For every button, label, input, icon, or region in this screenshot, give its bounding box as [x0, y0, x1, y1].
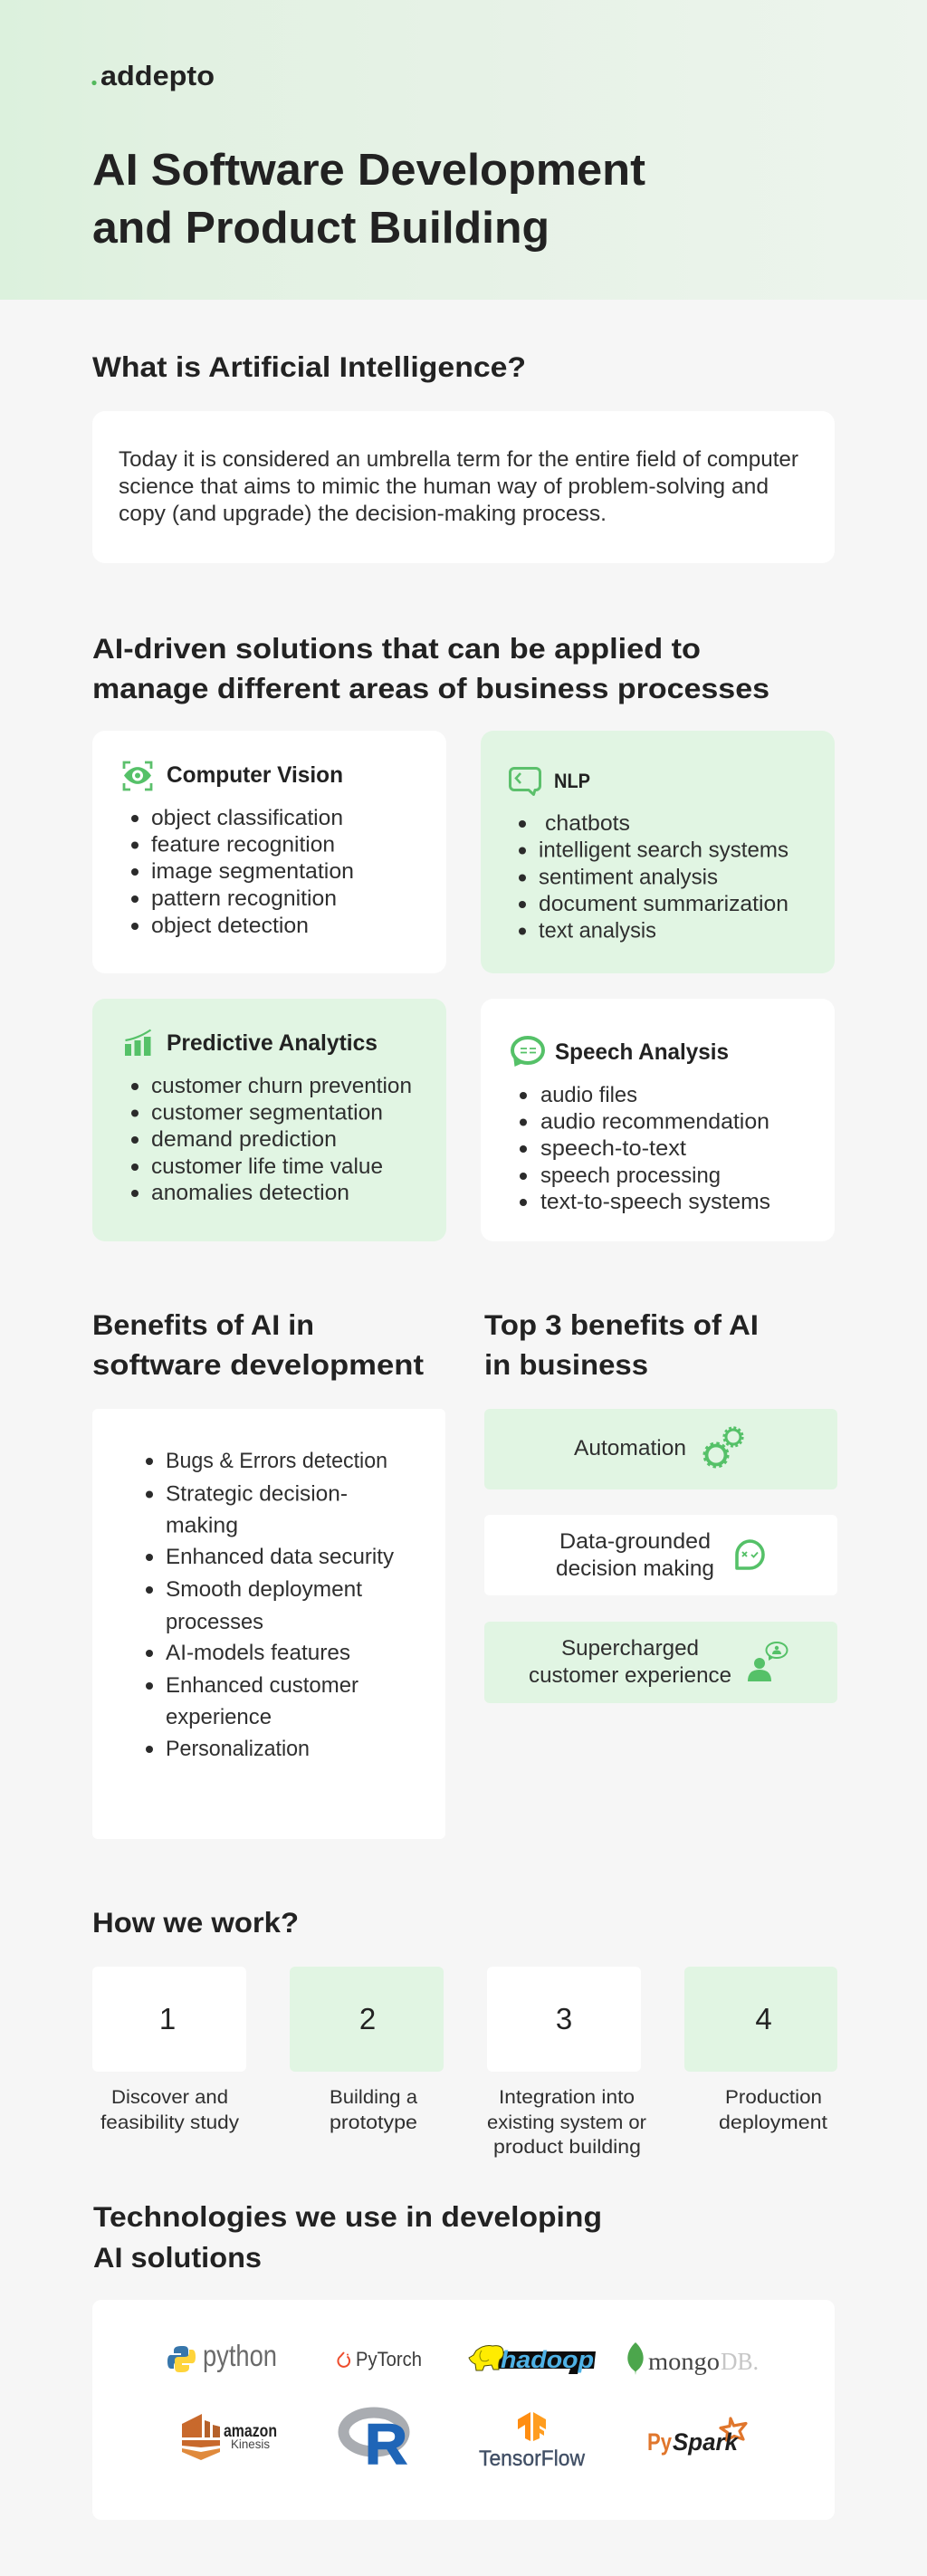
card title: NLP — [554, 770, 590, 792]
list: demand prediction — [151, 1127, 337, 1152]
logo: python: python — [203, 2339, 277, 2372]
step 2: Building a — [330, 2086, 417, 2108]
list: speech-to-text — [540, 1136, 686, 1161]
heading: AI-driven solutions: manage different areas of business processes — [92, 672, 769, 704]
panel: Automation — [484, 1409, 837, 1489]
icon: bar chart with trend — [125, 1030, 150, 1056]
benefits list: Smooth deployment — [166, 1577, 362, 1602]
heading: Benefits of AI in software development — [92, 1308, 425, 1381]
list: speech processing — [540, 1164, 721, 1188]
icon: bubble with cross and check — [737, 1541, 763, 1568]
card title: Predictive Analytics — [167, 1030, 377, 1056]
benefits list: Personalization — [166, 1737, 310, 1761]
logo: PyTorch: PyTorch — [356, 2348, 422, 2370]
logo: addepto: addepto — [100, 60, 215, 91]
logo: mongoDB: DB. — [721, 2348, 759, 2375]
benefits list: Strategic decision- — [166, 1481, 348, 1507]
list — [131, 1074, 412, 1205]
logo: hadoop: hadoop — [501, 2346, 594, 2373]
step 4: 4 — [755, 2002, 772, 2035]
heading: What is Artificial Intelligence: What is Artificial Intelligence? — [92, 350, 526, 383]
benefits list: Bugs & Errors detection — [166, 1449, 387, 1473]
step 4: Production — [725, 2086, 822, 2108]
heading: AI-driven solutions — [92, 632, 769, 704]
panel: Supercharged customer experience — [484, 1622, 837, 1703]
benefits list: Enhanced data security — [166, 1545, 394, 1569]
benefits list: processes — [166, 1610, 263, 1634]
step 1 — [92, 1967, 246, 2133]
logo: PySpark: Spark — [673, 2428, 740, 2456]
logo: amazon Kinesis — [182, 2414, 277, 2460]
list — [519, 811, 788, 943]
panel: Computer Vision — [92, 731, 446, 973]
card title: Computer Vision — [167, 762, 343, 788]
list: customer segmentation — [151, 1101, 383, 1125]
logo: R — [344, 2412, 407, 2476]
step 1: feasibility study — [100, 2112, 239, 2133]
definition text: copy (and upgrade) the decision-making process. — [119, 502, 607, 526]
benefits list: experience — [166, 1705, 272, 1729]
step 3 — [487, 1967, 646, 2158]
heading: Top 3 benefits of AI in business: in business — [484, 1348, 648, 1381]
step 3: product building — [493, 2136, 641, 2158]
label — [529, 1636, 731, 1688]
panel: Predictive Analytics — [92, 999, 446, 1241]
list: audio recommendation — [540, 1110, 769, 1134]
icon: eye in focus frame — [124, 762, 151, 790]
logo: PySpark: Py — [647, 2428, 672, 2456]
logo: PySpark — [647, 2418, 746, 2456]
title: and Product Building — [92, 203, 550, 253]
title: AI Software Development — [92, 145, 645, 195]
list: chatbots — [545, 811, 630, 836]
list: sentiment analysis — [539, 866, 718, 889]
label: Automation — [574, 1436, 686, 1460]
benefits list: Enhanced customer — [166, 1673, 358, 1698]
label: Data-grounded — [559, 1529, 711, 1554]
heading: Benefits of AI in software development: Benefits of AI in — [92, 1308, 314, 1341]
header banner — [0, 0, 927, 300]
step 3: 3 — [556, 2002, 572, 2035]
panel: Speech Analysis — [481, 999, 835, 1241]
label — [556, 1529, 714, 1581]
definition text: science that aims to mimic the human way of problem-solving and — [119, 474, 769, 499]
title — [92, 145, 645, 253]
list: object classification — [151, 806, 343, 830]
list — [520, 1083, 770, 1214]
list: image segmentation — [151, 859, 354, 884]
panel: benefits in software development — [92, 1409, 445, 1839]
benefits list: making — [166, 1514, 238, 1537]
heading: Technologies — [93, 2200, 602, 2274]
benefits list: AI-models features — [166, 1641, 350, 1665]
list: pattern recognition — [151, 886, 337, 911]
logo: TensorFlow: TensorFlow — [479, 2447, 585, 2471]
icon: person with bubble — [748, 1642, 788, 1681]
logo: mongoDB — [627, 2342, 759, 2375]
heading: Technologies: Technologies we use in developing — [93, 2200, 602, 2233]
logo: mongoDB: mongo — [648, 2348, 720, 2375]
label: customer experience — [529, 1663, 731, 1688]
heading: AI-driven solutions: AI-driven solutions that can be applied to — [92, 632, 701, 665]
section: How we work — [92, 1906, 837, 2158]
label: Supercharged — [561, 1636, 699, 1661]
list: anomalies detection — [151, 1181, 349, 1205]
step 3: Integration into — [499, 2086, 635, 2108]
step 2 — [290, 1967, 444, 2133]
logo: R: R — [365, 2413, 407, 2476]
panel: technology logos — [92, 2300, 835, 2520]
icon: chat bubble with chevron — [511, 768, 540, 795]
panel: NLP — [481, 731, 835, 973]
logo: python — [167, 2339, 277, 2372]
step 1: Discover and — [111, 2086, 228, 2108]
list: object detection — [151, 914, 309, 938]
panel: Data-grounded decision making — [484, 1515, 837, 1595]
step 4 — [684, 1967, 837, 2133]
step 4: deployment — [719, 2112, 827, 2133]
icon: speech bubble — [512, 1038, 543, 1067]
step 3: existing system or — [487, 2112, 646, 2133]
list: document summarization — [539, 892, 788, 916]
list: feature recognition — [151, 833, 335, 857]
step 2: prototype — [330, 2112, 417, 2133]
icon: gears — [704, 1428, 742, 1467]
heading: Top 3 benefits of AI in business — [484, 1308, 759, 1381]
list: customer churn prevention — [151, 1074, 412, 1098]
section: what is AI — [92, 350, 835, 563]
heading: Benefits of AI in software development: software development — [92, 1348, 425, 1381]
logo: TensorFlow — [479, 2412, 585, 2471]
list: intelligent search systems — [539, 838, 788, 862]
benefits list — [146, 1449, 394, 1761]
definition text — [119, 447, 798, 526]
heading: Technologies: AI solutions — [93, 2241, 262, 2274]
list: text-to-speech systems — [540, 1190, 770, 1214]
list: customer life time value — [151, 1154, 383, 1179]
panel: definition card — [92, 411, 835, 563]
list: text analysis — [539, 918, 656, 943]
label: decision making — [556, 1556, 714, 1581]
logo: hadoop — [469, 2346, 596, 2374]
step 2: 2 — [359, 2002, 376, 2035]
heading: How we work? — [92, 1906, 299, 1939]
logo: amazon Kinesis: amazon — [224, 2422, 277, 2441]
heading: Top 3 benefits of AI in business: Top 3 benefits of AI — [484, 1308, 759, 1341]
list: audio files — [540, 1083, 637, 1107]
step 1: 1 — [159, 2002, 176, 2035]
logo: amazon Kinesis: Kinesis — [231, 2437, 270, 2451]
card title: Speech Analysis — [555, 1039, 729, 1065]
list — [131, 806, 354, 938]
definition text: Today it is considered an umbrella term for the entire field of computer — [119, 447, 798, 472]
